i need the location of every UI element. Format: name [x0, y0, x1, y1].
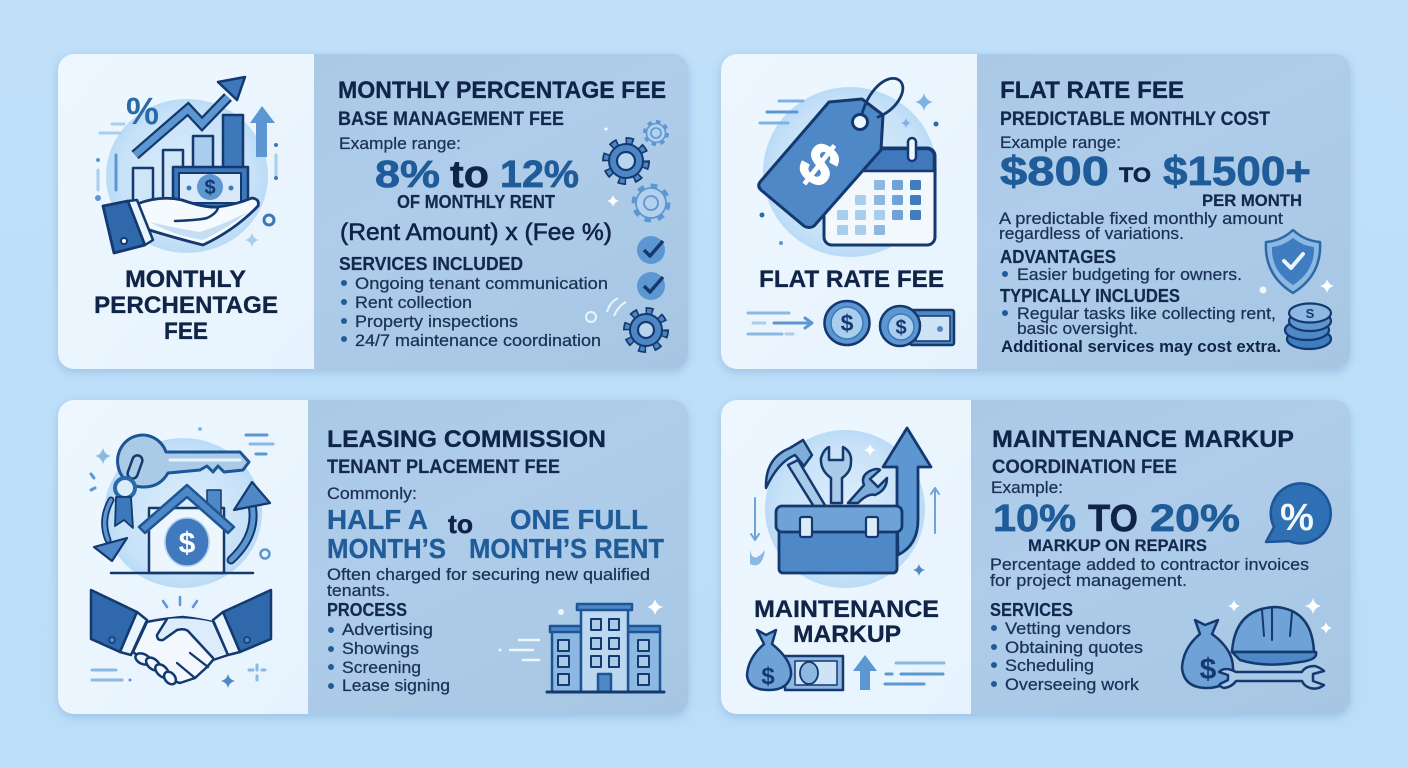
icon: money bag, bill and arrow: $ [761, 663, 775, 690]
icon: apartment building [498, 599, 664, 692]
big range: MONTH’S [327, 533, 446, 564]
typically includes [1000, 286, 1281, 356]
description [999, 209, 1283, 243]
heading: MAINTENANCE MARKUP [992, 426, 1294, 453]
process list: Lease signing [342, 676, 450, 695]
left heading: FLAT RATE FEE [759, 266, 944, 293]
icon: shield [1260, 230, 1334, 294]
formula: (Rent Amount) x (Fee %) [340, 219, 612, 246]
process list: PROCESS [327, 600, 407, 620]
left heading: PERCHENTAGE [94, 292, 278, 319]
process list: Advertising [342, 620, 433, 639]
big range [1000, 148, 1311, 194]
heading: MONTHLY PERCENTAGE FEE [338, 77, 666, 104]
icon: coin stack: S [1306, 306, 1315, 321]
range note: OF MONTHLY RENT [397, 192, 555, 212]
big range: $800 [1000, 148, 1109, 194]
description: Often charged for securing new qualified [327, 565, 650, 584]
left heading: FEE [164, 318, 208, 345]
description: tenants. [327, 581, 390, 600]
icon: toolbox with tools [750, 428, 939, 588]
icon: percent speech bubble [1266, 483, 1331, 543]
big range: 20% [1150, 498, 1240, 540]
icon: money bag, hard hat and wrench [1182, 598, 1332, 689]
icon: money bag, hard hat and wrench: $ [1200, 653, 1217, 686]
big range: TO [1088, 498, 1138, 540]
process list: Screening [342, 658, 421, 677]
range note: MARKUP ON REPAIRS [1028, 536, 1207, 555]
big range: to [450, 154, 489, 196]
big range [327, 504, 664, 564]
services list: Vetting vendors [1005, 619, 1131, 638]
advantages [1000, 247, 1242, 284]
big range: MONTH’S RENT [469, 533, 664, 564]
process list [327, 600, 450, 695]
left heading: MAINTENANCE [754, 596, 939, 623]
icon: coin stack [1285, 304, 1331, 349]
big range: TO [1119, 164, 1151, 187]
icon: price tag and calendar: $ [787, 129, 852, 200]
big range [375, 154, 579, 196]
services included list: Ongoing tenant communication [355, 274, 608, 293]
services list: Obtaining quotes [1005, 638, 1143, 657]
advantages: ADVANTAGES [1000, 247, 1116, 267]
services included list: SERVICES INCLUDED [339, 254, 523, 274]
icon: growth chart with money in hand: % [126, 91, 159, 133]
icon: price tag and calendar [759, 78, 938, 257]
left heading: MONTHLY [125, 266, 246, 293]
big range: ONE FULL [510, 504, 648, 535]
advantages: Easier budgeting for owners. [1017, 265, 1242, 284]
icon: coin and cash: $ [895, 317, 907, 339]
icon: coin and cash [748, 301, 954, 346]
services list: Scheduling [1005, 656, 1094, 675]
typically includes: TYPICALLY INCLUDES [1000, 286, 1180, 306]
services included list: Rent collection [355, 293, 472, 312]
panel: monthly percentage fee [58, 54, 688, 369]
big range [993, 498, 1240, 540]
icon: key and house [91, 427, 273, 588]
heading: FLAT RATE FEE [1000, 77, 1184, 104]
heading: LEASING COMMISSION [327, 426, 606, 453]
range note: PER MONTH [1202, 191, 1302, 210]
typically includes: Additional services may cost extra. [1001, 337, 1281, 356]
description [990, 555, 1309, 590]
subheading: PREDICTABLE MONTHLY COST [1000, 109, 1270, 130]
services included list [339, 254, 608, 350]
example label: Example range: [339, 134, 461, 153]
big range: $1500+ [1163, 148, 1311, 194]
icon: percent speech bubble: % [1280, 497, 1314, 539]
typically includes: basic oversight. [1017, 319, 1138, 338]
left heading [754, 596, 939, 648]
description [327, 565, 650, 600]
big range: HALF A [327, 504, 428, 535]
example label: Example range: [1000, 133, 1121, 152]
icon: coin and cash: $ [841, 310, 854, 336]
icon: growth chart with money in hand: $ [204, 177, 216, 199]
services list: SERVICES [990, 600, 1073, 620]
panel: leasing commission [58, 400, 688, 714]
subheading: TENANT PLACEMENT FEE [327, 457, 560, 478]
left heading: MARKUP [793, 621, 901, 648]
services included list: 24/7 maintenance coordination [355, 331, 601, 350]
left heading [94, 266, 278, 345]
process list: Showings [342, 639, 419, 658]
commonly label: Commonly: [327, 484, 417, 503]
subheading: BASE MANAGEMENT FEE [338, 109, 564, 130]
panel: flat rate fee [721, 54, 1350, 369]
services included list: Property inspections [355, 312, 518, 331]
description: Percentage added to contractor invoices [990, 555, 1309, 574]
big range: 12% [500, 154, 579, 196]
icon: money bag, bill and arrow [747, 630, 944, 690]
description: for project management. [990, 571, 1187, 590]
icon: key and house: $ [179, 527, 196, 560]
typically includes: Regular tasks like collecting rent, [1017, 304, 1276, 323]
icon: handshake [91, 590, 271, 688]
services list: Overseeing work [1005, 675, 1140, 694]
big range: 8% [375, 154, 440, 196]
icon: gears and checkmarks [586, 122, 668, 349]
description: A predictable fixed monthly amount [999, 209, 1283, 228]
big range: 10% [993, 498, 1076, 540]
panel: maintenance markup [721, 400, 1350, 714]
services list [990, 600, 1143, 694]
big range: to [448, 509, 473, 539]
example label: Example: [991, 478, 1063, 497]
subheading: COORDINATION FEE [992, 457, 1177, 478]
icon: growth chart with money in hand [95, 77, 278, 253]
description: regardless of variations. [999, 224, 1184, 243]
